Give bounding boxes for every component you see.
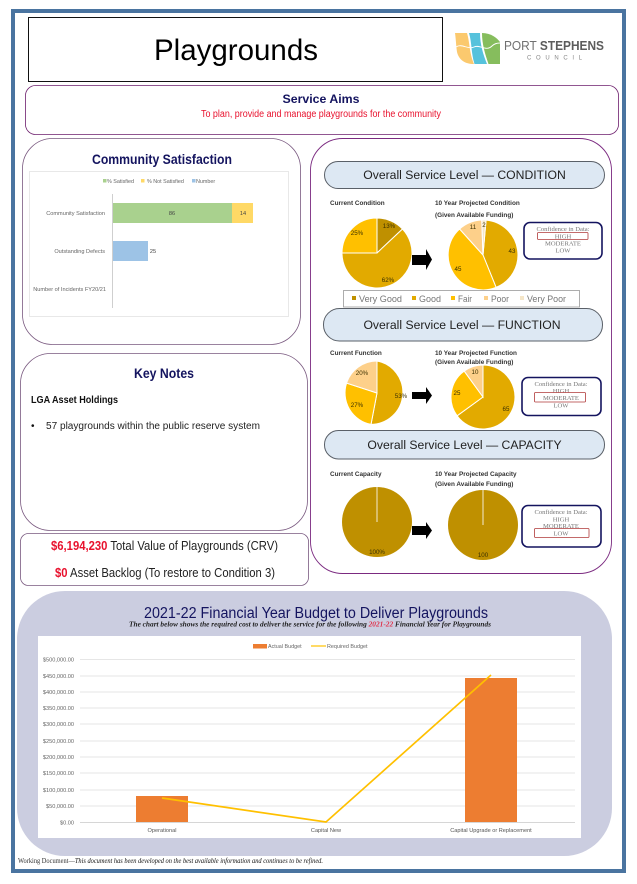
- panel: service aims: [26, 86, 618, 134]
- heading: capacity: [324, 430, 604, 459]
- logo: Port Stephens Council: COUNCIL: [527, 56, 583, 62]
- legend: condition ratings: Very Poor: [527, 294, 566, 305]
- panel: financial year budget: [17, 591, 612, 856]
- pie chart: projected condition: (Given Available Funding): [435, 212, 513, 219]
- heading: key notes: Key Notes: [134, 365, 194, 381]
- callout: confidence in data, capacity: Confidence in Data:: [534, 509, 588, 516]
- pie chart: projected condition: 2: [482, 222, 486, 229]
- legend: condition ratings: Fair: [458, 294, 472, 305]
- callout: confidence in data, condition: LOW: [555, 248, 571, 254]
- bar and line chart: budget: $500,000.00: [43, 658, 74, 664]
- heading: function: [324, 308, 602, 341]
- title: Playgrounds: [154, 34, 318, 67]
- heading: budget: 2021-22 Financial Year Budget to Deliver Playgrounds: [144, 605, 488, 622]
- pie chart: current capacity: [330, 471, 412, 557]
- pie chart: current condition: 25%: [351, 230, 364, 237]
- bar chart: community satisfaction: [30, 172, 288, 316]
- pie chart: projected condition: 10 Year Projected Condition: [435, 200, 520, 207]
- logo: Port Stephens Council: PORT STEPHENS: [504, 38, 604, 53]
- pie chart: projected condition: 43: [509, 248, 516, 255]
- bar and line chart: budget: Actual Budget: [268, 644, 302, 650]
- panel: service aims: To plan, provide and manage playgrounds for the community: [201, 109, 441, 120]
- bar and line chart: budget: [38, 636, 581, 838]
- pie chart: current condition: 13%: [383, 223, 396, 230]
- bar chart: community satisfaction: Number of Incidents FY20/21: [33, 287, 106, 293]
- bar and line chart: budget: $100,000.00: [43, 788, 74, 794]
- callout: confidence in data, condition: MODERATE: [545, 240, 581, 248]
- panel: key notes: •: [31, 421, 35, 432]
- title: [28, 18, 442, 82]
- bar and line chart: budget: $450,000.00: [43, 674, 74, 680]
- panel: key notes: LGA Asset Holdings: [31, 394, 118, 406]
- pie chart: current function: 53%: [395, 393, 408, 400]
- bar and line chart: budget: $400,000.00: [43, 690, 74, 696]
- heading: capacity: Overall Service Level — CAPACITY: [367, 438, 562, 452]
- heading: condition: [324, 162, 604, 188]
- callout: confidence in data, function: Confidence in Data:: [534, 381, 588, 388]
- pie chart: projected condition: 11: [470, 224, 477, 231]
- panel: key notes: 57 playgrounds within the public reserve system: [46, 421, 260, 432]
- bar chart: community satisfaction: Number: [196, 179, 215, 185]
- callout: confidence in data, function: [522, 378, 601, 416]
- legend: condition ratings: Good: [419, 294, 441, 305]
- panel: key notes: [20, 354, 308, 530]
- bar chart: community satisfaction: % Satisfied: [107, 179, 134, 185]
- arrow: [412, 249, 432, 270]
- pie chart: projected condition: [435, 200, 520, 290]
- pie chart: projected capacity: 10 Year Projected Capacity: [435, 471, 517, 478]
- legend: condition ratings: Poor: [491, 294, 509, 305]
- callout: confidence in data, function: LOW: [553, 402, 569, 410]
- callout: confidence in data, capacity: MODERATE: [543, 523, 579, 530]
- pie chart: current condition: [330, 200, 412, 288]
- legend: condition ratings: Very Good: [359, 294, 402, 305]
- bar chart: community satisfaction: Outstanding Defects: [54, 249, 105, 255]
- panel: community satisfaction: [22, 138, 300, 344]
- bar and line chart: budget: $250,000.00: [43, 739, 74, 745]
- pie chart: projected function: (Given Available Funding): [435, 359, 513, 366]
- legend: condition ratings: [344, 290, 580, 307]
- callout: confidence in data, capacity: HIGH: [553, 516, 569, 524]
- bar and line chart: budget: $300,000.00: [43, 722, 74, 728]
- subtitle: budget: The chart below shows the required cost to deliver the service for the following 2021-22 Financial Year for Playgrounds: [129, 620, 491, 628]
- bar chart: community satisfaction: 14: [240, 211, 246, 217]
- pie chart: current function: [330, 350, 408, 424]
- callout: confidence in data, function: MODERATE: [543, 395, 579, 402]
- pie chart: current function: Current Function: [330, 350, 382, 357]
- bar and line chart: budget: $350,000.00: [43, 706, 74, 712]
- bar and line chart: budget: Operational: [148, 828, 176, 834]
- bar and line chart: budget: $50,000.00: [46, 804, 74, 810]
- callout: confidence in data, condition: HIGH: [555, 234, 571, 240]
- pie chart: current function: 20%: [356, 370, 369, 377]
- panel: asset values: $0 Asset Backlog (To restore to Condition 3): [55, 566, 275, 580]
- pie chart: projected function: 10 Year Projected Function: [435, 350, 517, 357]
- panel: overall service levels: [310, 138, 612, 574]
- bar chart: community satisfaction: Community Satisfaction: [46, 211, 105, 217]
- pie chart: current condition: 62%: [382, 277, 395, 284]
- bar and line chart: budget: $150,000.00: [43, 771, 74, 777]
- footer note: Working Document—This document has been developed on the best available information and continues to be refined.: [18, 856, 323, 865]
- arrow: [412, 387, 432, 404]
- callout: confidence in data, condition: Confidence in Data:: [536, 226, 590, 233]
- pie chart: projected capacity: 100: [478, 552, 489, 559]
- bar and line chart: budget: Required Budget: [327, 644, 368, 650]
- bar chart: community satisfaction: 25: [150, 249, 156, 255]
- heading: service aims: Service Aims: [282, 92, 360, 106]
- bar and line chart: budget: Capital Upgrade or Replacement: [450, 828, 532, 834]
- pie chart: projected function: 65: [503, 406, 510, 413]
- pie chart: projected function: 10: [472, 369, 479, 376]
- pie chart: current capacity: 100%: [369, 549, 385, 556]
- pie chart: projected capacity: [435, 471, 518, 560]
- pie chart: projected function: [435, 350, 517, 429]
- heading: community satisfaction: Community Satisfaction: [92, 151, 232, 167]
- pie chart: projected condition: 45: [455, 266, 462, 273]
- bar and line chart: budget: $0.00: [60, 820, 74, 826]
- bar chart: community satisfaction: 86: [169, 211, 175, 217]
- panel: asset values: [20, 534, 308, 586]
- callout: confidence in data, function: HIGH: [553, 388, 569, 395]
- pie chart: projected capacity: (Given Available Funding): [435, 481, 513, 488]
- panel: asset values: $6,194,230 Total Value of Playgrounds (CRV): [51, 539, 278, 553]
- arrow: [412, 522, 432, 539]
- logo: Port Stephens Council: [455, 33, 604, 64]
- bar chart: community satisfaction: % Not Satisfied: [147, 179, 184, 185]
- pie chart: current function: 27%: [351, 402, 364, 409]
- pie chart: projected function: 25: [454, 390, 461, 397]
- callout: confidence in data, condition: [524, 222, 602, 259]
- pie chart: current capacity: Current Capacity: [330, 471, 382, 478]
- callout: confidence in data, capacity: [522, 506, 601, 547]
- heading: condition: Overall Service Level — CONDITION: [363, 168, 566, 182]
- pie chart: current condition: Current Condition: [330, 200, 385, 207]
- bar and line chart: budget: Capital New: [311, 828, 342, 834]
- callout: confidence in data, capacity: LOW: [553, 530, 569, 538]
- bar and line chart: budget: $200,000.00: [43, 755, 74, 761]
- heading: function: Overall Service Level — FUNCTION: [363, 318, 561, 332]
